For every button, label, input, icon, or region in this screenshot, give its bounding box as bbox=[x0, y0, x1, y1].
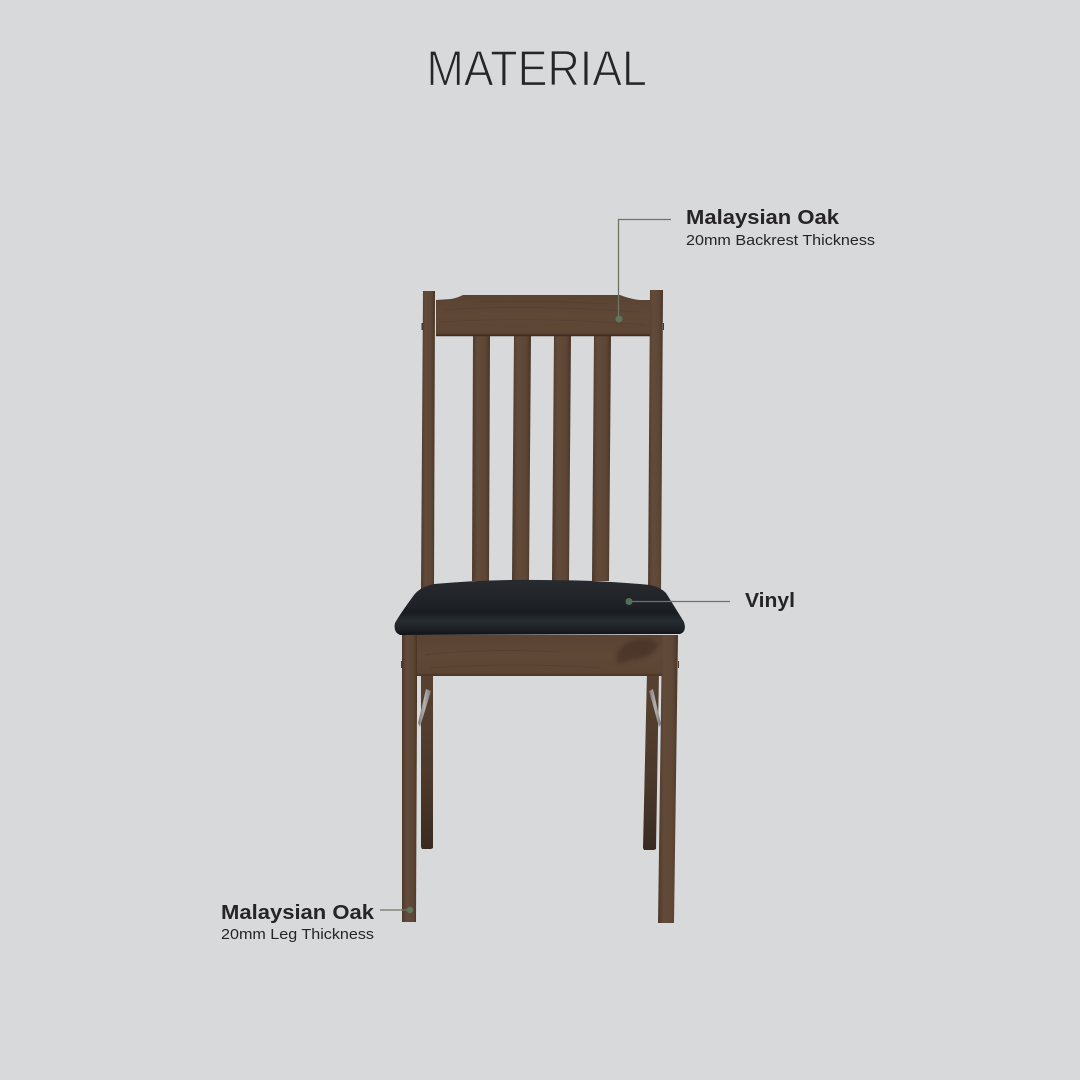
front legs bbox=[401, 635, 679, 923]
seat apron bbox=[417, 635, 662, 676]
callout: backrest material bbox=[616, 207, 875, 322]
callout: seat material bbox=[626, 590, 795, 612]
callout: leg material: 20mm Leg Thickness bbox=[221, 926, 374, 943]
backrest slats bbox=[472, 336, 611, 581]
vinyl seat cushion bbox=[395, 580, 685, 635]
callout: backrest material: Malaysian Oak bbox=[686, 207, 840, 229]
callout: seat material: Vinyl bbox=[745, 590, 795, 612]
rear legs bbox=[421, 672, 659, 850]
callout: leg material bbox=[221, 902, 413, 943]
callout: backrest material: 20mm Backrest Thickness bbox=[686, 232, 875, 249]
callout: leg material: Malaysian Oak bbox=[221, 902, 375, 924]
title: MATERIAL bbox=[426, 41, 647, 97]
back posts bbox=[421, 290, 664, 592]
top rail bbox=[436, 295, 650, 336]
chair illustration bbox=[395, 290, 685, 923]
metal folding braces bbox=[418, 689, 661, 727]
